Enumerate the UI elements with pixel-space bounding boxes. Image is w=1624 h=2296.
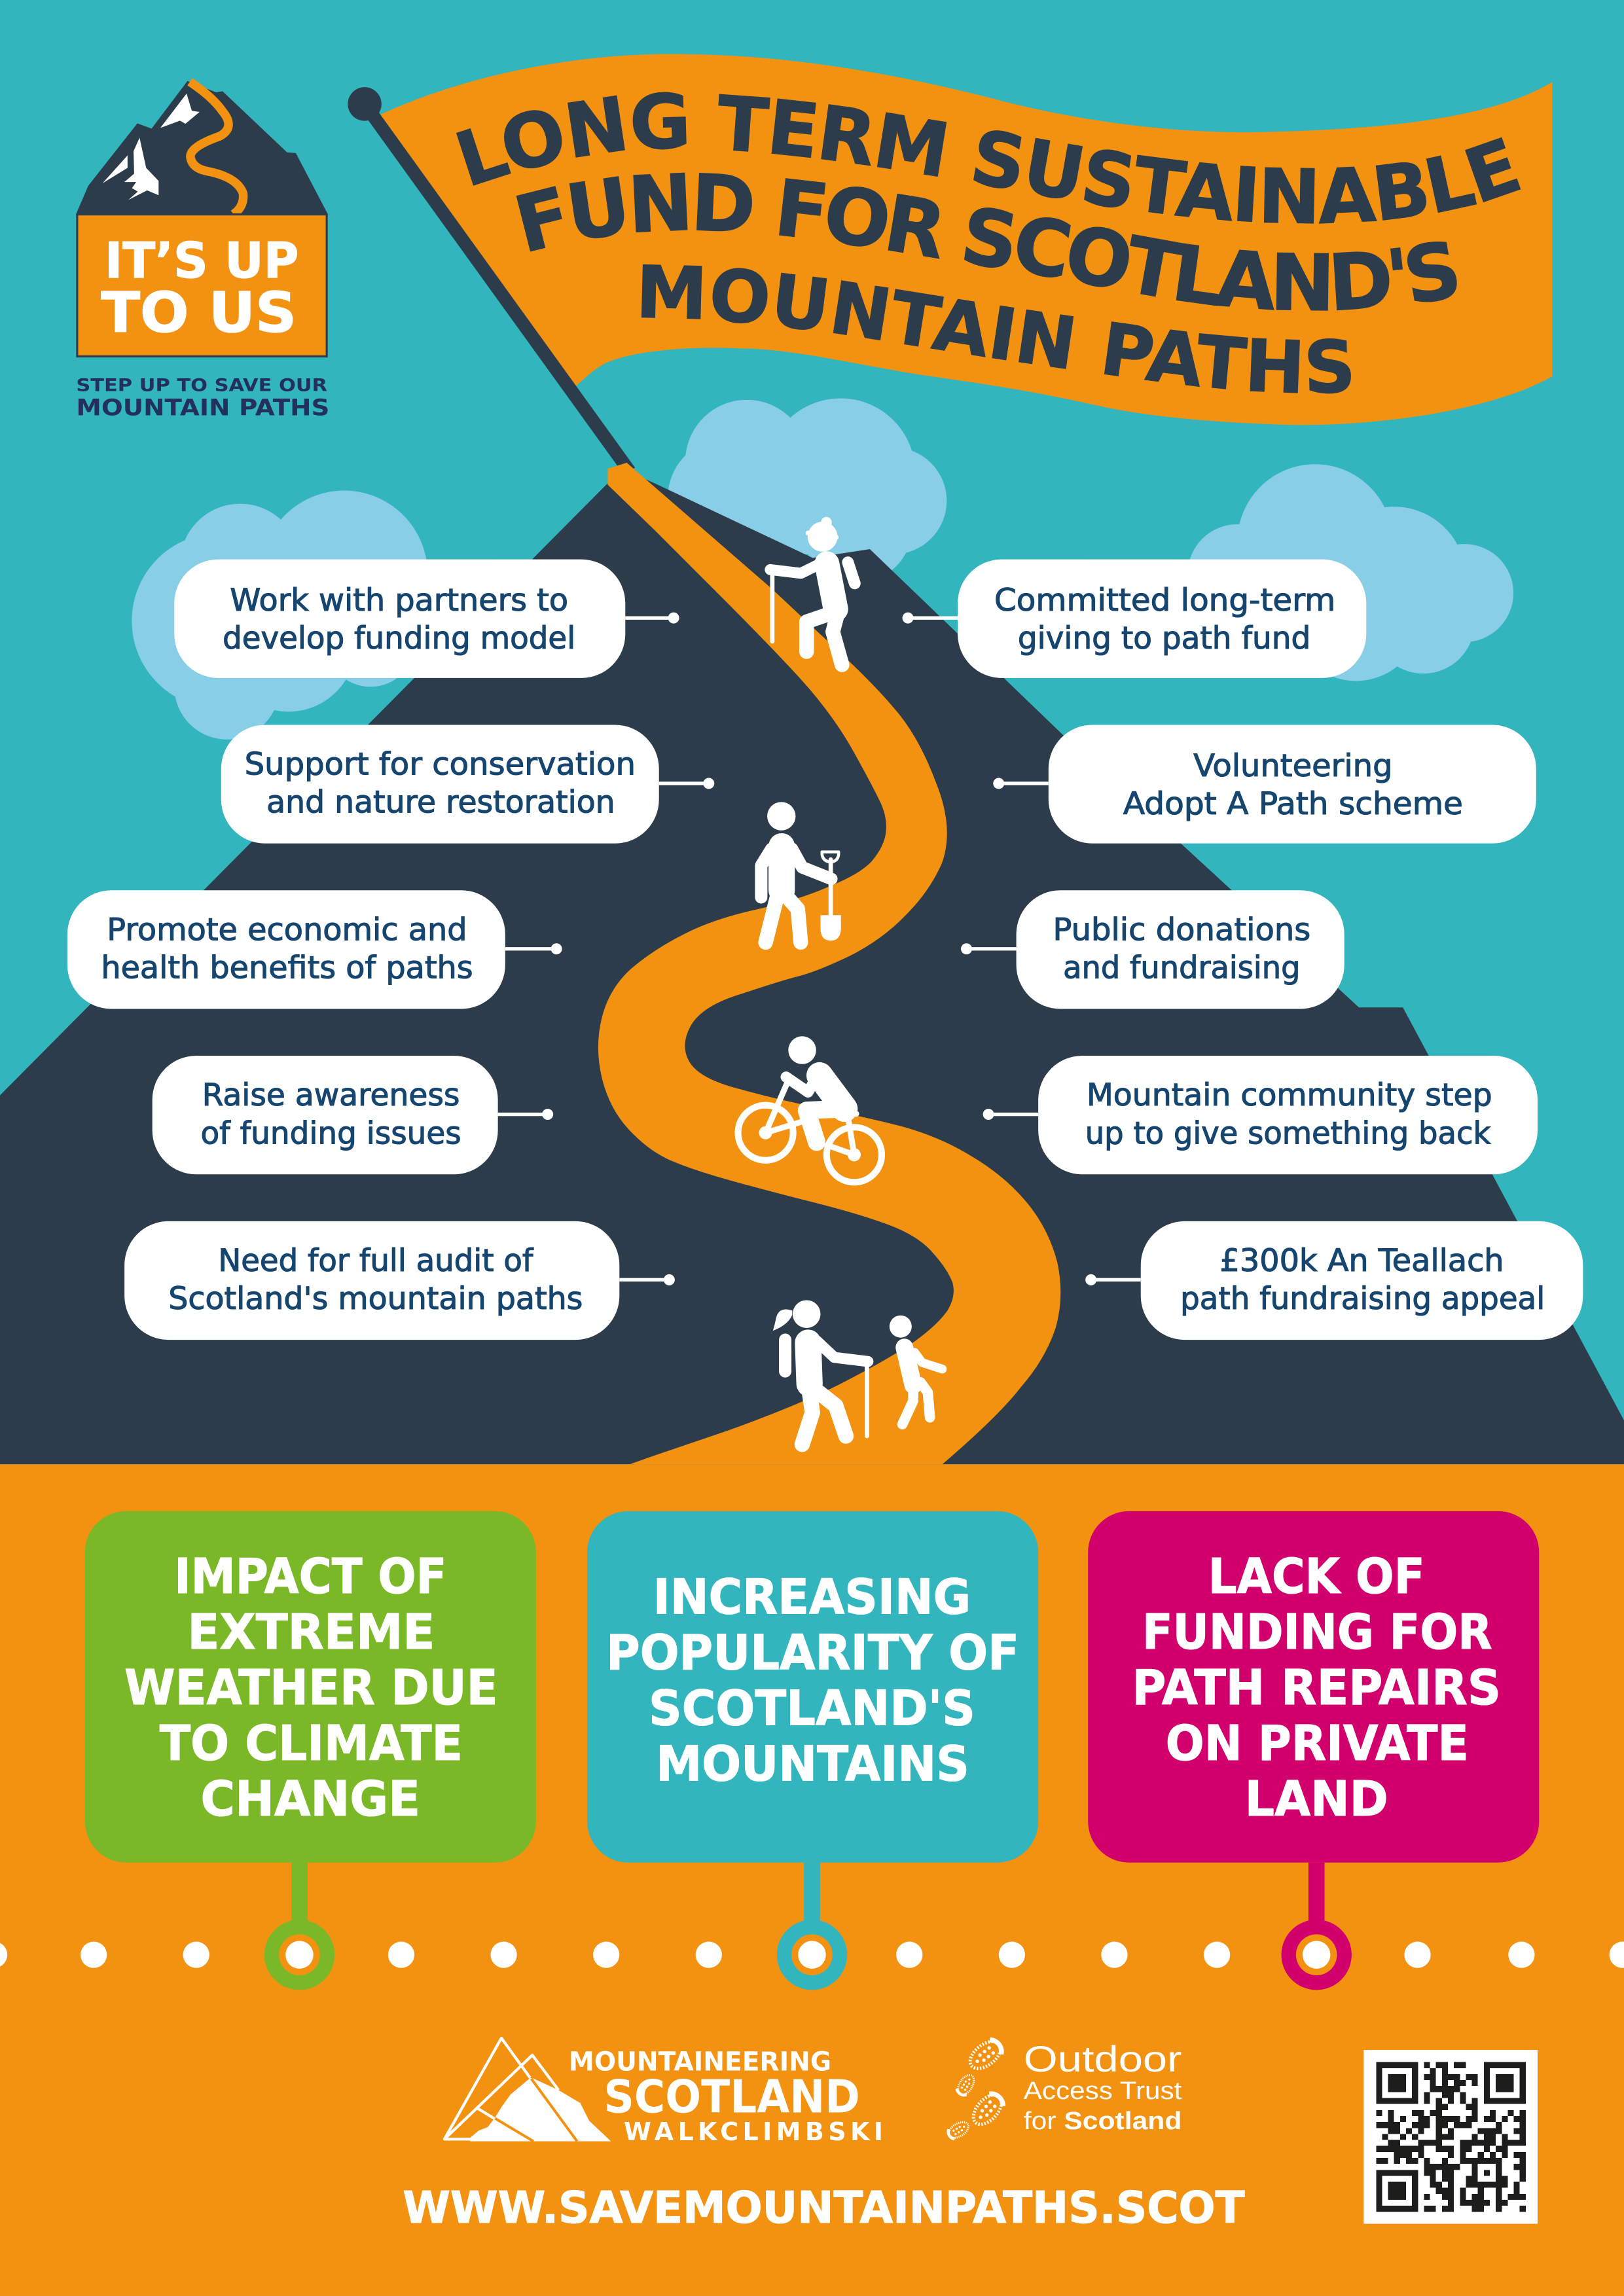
mountain path: [598, 463, 1060, 1464]
figure: woman walker: [773, 1300, 868, 1444]
logo: Outdoor Access Trust for Scotland: Access Trust: [1024, 2077, 1182, 2105]
logo box: [77, 215, 327, 357]
bubble: donations: [961, 890, 1344, 1009]
panel: lack of funding: PATH REPAIRS: [1132, 1660, 1501, 1716]
panel: popularity: INCREASING: [653, 1569, 971, 1625]
bubble: volunteering: Adopt A Path scheme: [1123, 786, 1463, 822]
dotted timeline: [0, 1942, 1624, 1968]
logo strapline: STEP UP TO SAVE OUR: [76, 376, 327, 395]
bubble: mountain community: [983, 1056, 1538, 1174]
panel: popularity: [587, 1511, 1038, 1990]
figure: volunteer with shovel: [761, 802, 841, 942]
panel: lack of funding: LACK OF: [1208, 1549, 1425, 1605]
panel: lack of funding: LAND: [1245, 1771, 1388, 1827]
panel: extreme weather: TO CLIMATE: [160, 1715, 463, 1772]
bubble: mountain community: up to give something back: [1085, 1115, 1491, 1151]
panel: popularity: POPULARITY OF: [606, 1624, 1019, 1681]
panel: popularity: MOUNTAINS: [656, 1736, 969, 1792]
logo: Mountaineering Scotland: [444, 2038, 883, 2146]
bubble: audit: Need for full audit of: [218, 1243, 534, 1279]
title on flag: [456, 92, 1521, 394]
title on flag: FUND FOR SCOTLAND'S: [516, 173, 1457, 311]
bubble: audit: Scotland's mountain paths: [168, 1281, 583, 1317]
logo text: IT’S UP: [105, 232, 298, 289]
bubble: An Teallach appeal: [1085, 1221, 1583, 1340]
logo: Mountaineering Scotland: WALKCLIMBSKI: [624, 2117, 883, 2146]
bubble: conservation: [221, 725, 714, 844]
bubble: An Teallach appeal: £300k An Teallach: [1220, 1243, 1504, 1279]
bubble: raise awareness: of funding issues: [200, 1115, 461, 1151]
panel: lack of funding: FUNDING FOR: [1142, 1604, 1492, 1660]
icon: footprints: [945, 2034, 1009, 2142]
logo snow: [103, 94, 200, 200]
title on flag: LONG TERM SUSTAINABLE: [456, 92, 1521, 224]
panel: extreme weather: EXTREME: [187, 1604, 435, 1660]
panel: extreme weather: IMPACT OF: [174, 1549, 446, 1605]
bubble: work with partners: develop funding model: [223, 620, 575, 656]
flag: [378, 54, 1552, 425]
bottom orange panel: [0, 1464, 1624, 2296]
bubble: work with partners: [174, 560, 679, 678]
logo: It's up to us: [76, 81, 329, 422]
bubble: audit: [124, 1221, 675, 1340]
cloud: right: [1187, 464, 1513, 681]
bubble: volunteering: [993, 725, 1536, 844]
logo: It's up to us: TO US: [101, 281, 297, 346]
bubble: long-term giving: giving to path fund: [1018, 620, 1310, 656]
website url: WWW.SAVEMOUNTAINPATHS.SCOT: [403, 2182, 1245, 2233]
panel: extreme weather: WEATHER DUE: [124, 1660, 498, 1716]
bubble: conservation: Support for conservation: [245, 747, 636, 783]
logo: Outdoor Access Trust for Scotland: [945, 2034, 1182, 2142]
bubble: economic benefits: Promote economic and: [107, 912, 467, 948]
bubble: long-term giving: [903, 560, 1366, 678]
logo path: [190, 82, 244, 214]
logo: It's up to us: MOUNTAIN PATHS: [76, 395, 329, 422]
bubble: mountain community: Mountain community step: [1087, 1077, 1492, 1113]
bubble: economic benefits: [67, 890, 562, 1009]
panel: popularity: SCOTLAND'S: [649, 1680, 975, 1736]
panel: lack of funding: ON PRIVATE: [1166, 1715, 1469, 1772]
figure: hiker with pole: [770, 517, 855, 665]
bubble: raise awareness: [153, 1056, 553, 1174]
figure: child walker: [890, 1316, 943, 1424]
bubble: donations: and fundraising: [1063, 950, 1301, 986]
logo: Mountaineering Scotland: MOUNTAINEERING: [569, 2047, 831, 2077]
cloud: centre: [668, 399, 947, 583]
cloud: left: [132, 491, 427, 740]
panel: extreme weather: CHANGE: [200, 1771, 420, 1827]
logo: Outdoor Access Trust for Scotland: Outdoor: [1024, 2038, 1182, 2079]
bubble: raise awareness: Raise awareness: [202, 1077, 460, 1113]
QR code: [1363, 2050, 1538, 2224]
bubble: An Teallach appeal: path fundraising appeal: [1180, 1281, 1545, 1317]
bubble: work with partners: Work with partners to: [230, 583, 568, 619]
panel: extreme weather: [85, 1511, 536, 1990]
bubble: donations: Public donations: [1053, 912, 1310, 948]
bubble: volunteering: Volunteering: [1193, 748, 1393, 784]
panel: lack of funding: [1088, 1511, 1539, 1990]
bubble: long-term giving: Committed long-term: [994, 583, 1335, 619]
flag pole: [348, 87, 630, 471]
figure: cyclist: [738, 1036, 882, 1182]
logo mountain: [76, 81, 327, 215]
title on flag: MOUNTAIN PATHS: [641, 264, 1351, 394]
bubble: economic benefits: health benefits of paths: [101, 950, 473, 986]
bubble: conservation: and nature restoration: [266, 785, 615, 821]
logo: Outdoor Access Trust for Scotland: for Scotland: [1024, 2108, 1182, 2135]
logo: Mountaineering Scotland: SCOTLAND: [604, 2072, 860, 2124]
mountain: [0, 469, 1624, 1464]
